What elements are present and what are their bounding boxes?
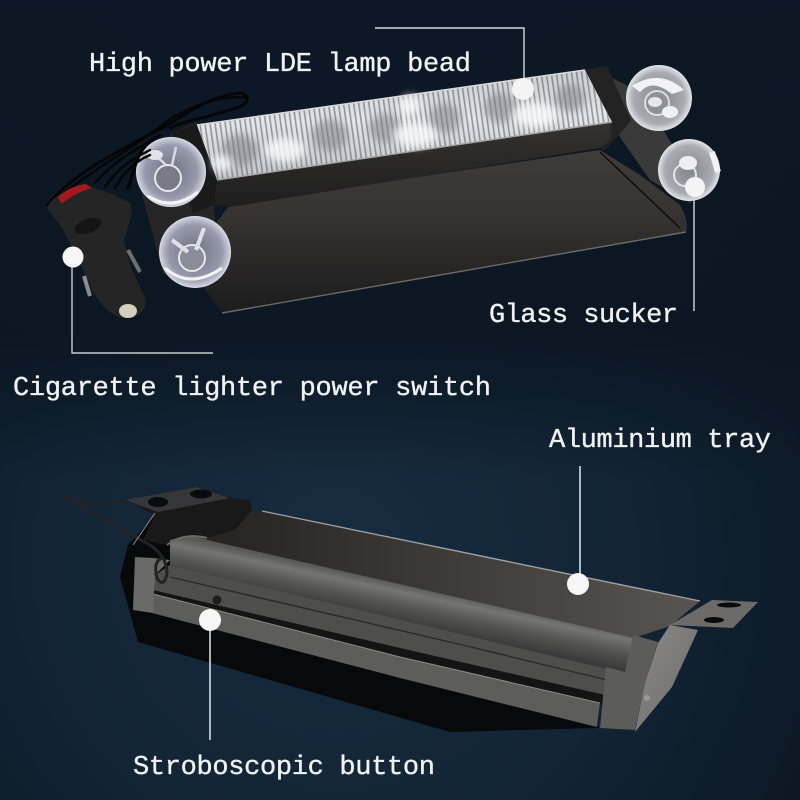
right bracket arm [612, 78, 700, 203]
right end cap [600, 635, 658, 730]
callout: cigarette lighter power switch: Cigarette lighter power switch [13, 374, 491, 404]
callout: stroboscopic button [133, 609, 435, 783]
left end cap [133, 557, 170, 613]
left bracket arm [140, 122, 223, 313]
strip groove [170, 577, 607, 680]
thin bracket wire [133, 513, 155, 545]
lower strip [152, 594, 600, 727]
dark end cap left [172, 124, 217, 213]
tube collar [167, 536, 207, 545]
tray rim highlight [222, 232, 686, 313]
dark end cap right [585, 66, 631, 150]
tray rim highlight [262, 511, 700, 601]
lens tube [170, 537, 655, 680]
housing strip [214, 122, 612, 207]
callout: cigarette lighter power switch [13, 246, 491, 404]
callout: aluminium tray [549, 426, 771, 595]
callout: aluminium tray: Aluminium tray [549, 426, 771, 456]
callout: lamp bead [89, 28, 534, 100]
callout: stroboscopic button: Stroboscopic button [133, 753, 435, 783]
cigarette lighter plug [47, 184, 145, 318]
callout: glass sucker: Glass sucker [489, 301, 678, 331]
suction cup: bottom right [658, 139, 720, 201]
tray back wall [150, 510, 700, 640]
tray drop shadow [120, 510, 600, 732]
callout: lamp bead: High power LDE lamp bead [89, 50, 471, 80]
strip edge highlight [153, 594, 600, 703]
tray right fold [600, 152, 680, 228]
right flap [635, 600, 758, 732]
left mounting flange [125, 487, 252, 545]
suction cup: bottom left [159, 216, 231, 288]
dark channel [153, 590, 605, 705]
middle strip [153, 565, 620, 705]
power cable [48, 93, 248, 205]
lens [197, 70, 612, 180]
suction cup: top left [136, 137, 206, 207]
stroboscopic switch [212, 596, 222, 604]
tray [186, 150, 687, 313]
product: light bar, rear view [65, 487, 758, 732]
callout: glass sucker [489, 177, 705, 331]
product: light bar, front view [47, 65, 720, 318]
suction cup: top right [626, 65, 692, 131]
cable [65, 497, 167, 582]
